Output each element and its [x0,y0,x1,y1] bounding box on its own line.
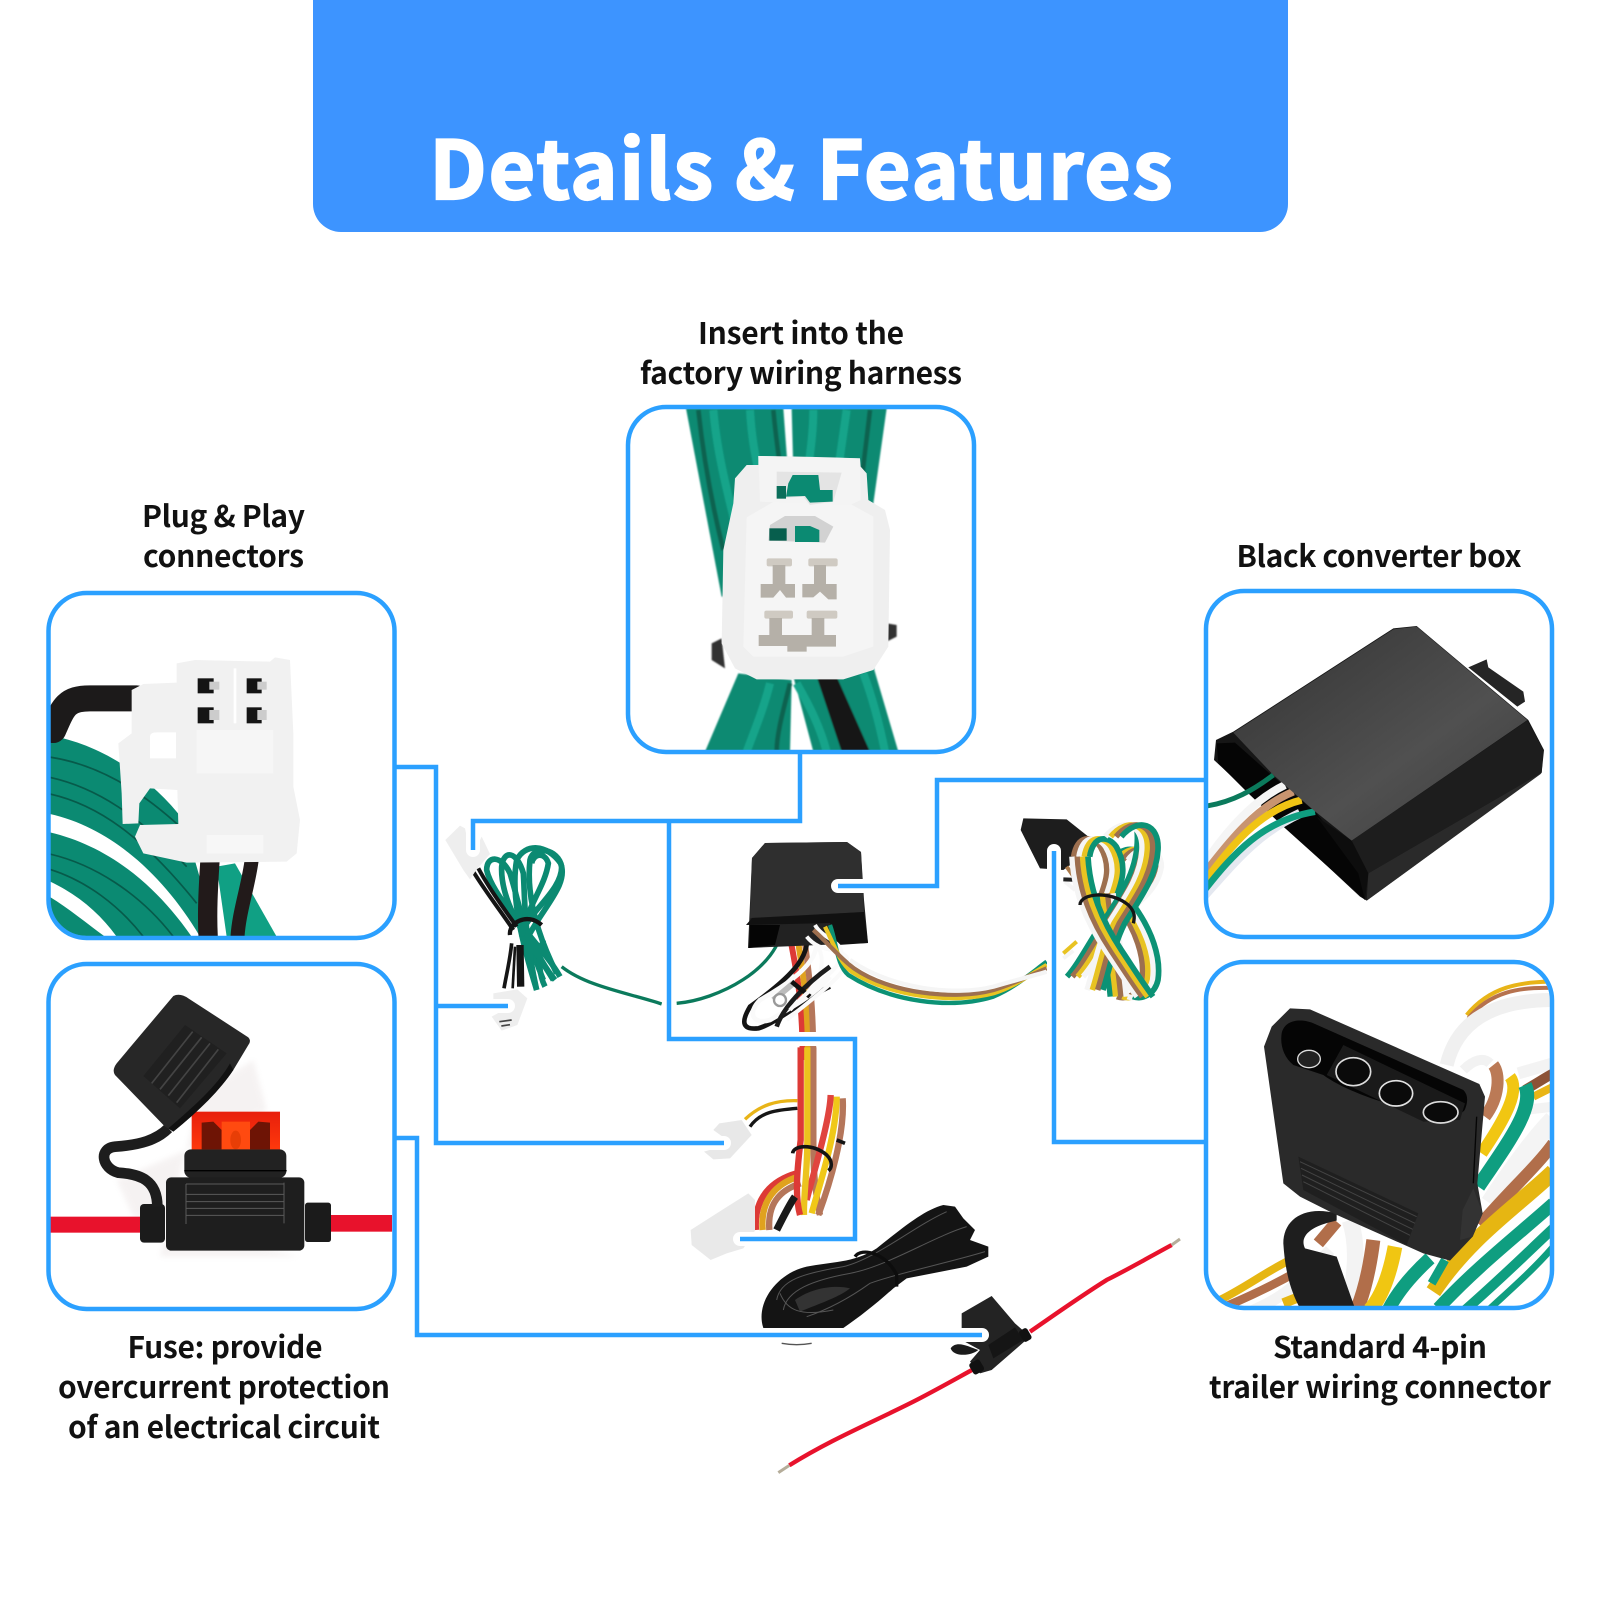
flat 4-pin plug [1021,818,1088,890]
coil tie [855,1252,897,1287]
frame: 4-pin connector [1206,962,1552,1308]
panel: converter box photo [1203,626,1544,901]
secondary white loops over box edge [787,925,847,1020]
leader lines [393,752,1206,1335]
green loops [487,848,562,990]
label: 4-pin connector [1209,1323,1552,1407]
box underside [1214,626,1544,901]
black harness wires [473,868,521,988]
frame: fuse [48,964,394,1309]
white connector housing [722,456,890,679]
plug contacts [499,1020,512,1026]
cable tie [712,623,897,668]
panel: factory harness photo [686,408,898,752]
label: plug and play: connectors [143,532,304,576]
label: fuse: Fuse: provide [128,1323,322,1367]
label: factory harness: factory wiring harness [640,349,962,393]
frame: plug connectors [48,593,394,938]
coil sliver [782,1343,812,1345]
green harness wires [686,408,898,752]
connector contacts [759,558,838,652]
product: green harness coil [445,826,783,1031]
back strands [1074,839,1161,998]
white plug connector [118,657,300,863]
fuse blade [192,1112,280,1152]
connector windows [768,472,842,543]
label: fuse: of an electrical circuit [68,1403,380,1447]
label: converter box: Black converter box [1236,532,1522,576]
label: 4-pin connector: trailer wiring connector [1209,1363,1552,1407]
panel: plug and play photo [47,657,300,940]
product: trailer wire coil [1021,818,1161,998]
trailer cable tie [1080,895,1134,923]
header banner [313,0,1288,232]
black 4-pin housing [1264,1008,1485,1261]
black and white leads with ring terminal [744,927,830,1029]
label: plug and play: Plug & Play [142,492,305,536]
bundle cable ties [793,1140,845,1171]
small plug leads [745,1101,797,1127]
cable tie [510,919,542,935]
fuse cap [114,995,250,1132]
label: plug and play [142,492,305,576]
fuse strap [104,1128,168,1207]
small fuse holder [951,1296,1033,1375]
label: 4-pin connector: Standard 4-pin [1273,1323,1487,1367]
upper white plug [445,826,490,879]
small white plug [704,1120,752,1159]
frame: factory harness [628,407,974,752]
black wires [53,698,252,940]
lower white plug [492,989,527,1031]
product: converter box wiring [744,842,1077,1060]
small converter box [746,842,868,948]
connector strap loop [1283,1211,1355,1308]
red and tan coil [756,1047,843,1230]
title: Details & Features [430,107,1172,223]
white halos around leader lines [436,821,1054,1335]
shadow [120,1064,278,1256]
long green wire left [562,967,662,1004]
white tube connector [691,1193,755,1260]
panel: fuse photo [47,995,393,1257]
connector pins [198,678,267,723]
banner background [313,0,1288,232]
converter wires [1203,775,1315,897]
red fuse wire [789,1245,1172,1465]
leader: plug lower branch [436,1004,508,1008]
leader: converter box [838,780,1206,886]
box tab [1468,659,1525,707]
label: factory harness [640,309,962,393]
leader: factory harness [473,752,800,850]
red yellow brown wires upper [788,927,813,1060]
panel: 4-pin connector photo [1220,982,1553,1313]
long green wire right [677,924,783,1003]
black cable coil [762,1205,988,1328]
front strands [1067,825,1158,997]
trailer wires [1220,982,1553,1313]
leader: fuse [393,1138,982,1335]
leader: 4-pin connector [1054,851,1206,1142]
product: fused power harness [691,1047,1180,1473]
label: factory harness: Insert into the [698,309,904,353]
fuse holder body [140,1149,331,1251]
label: fuse: overcurrent protection [58,1363,390,1407]
connector sockets [1298,1050,1458,1123]
green wire coil [47,735,277,937]
leader: harness branch to red wires [669,821,855,1239]
wire tips [778,1239,1180,1473]
leader: plug connectors [394,767,724,1143]
black box shell [1233,627,1543,901]
frame: converter box [1206,591,1552,937]
panel frames [48,407,1552,1309]
label: fuse [58,1323,390,1447]
red wire [47,1215,393,1233]
flat four wire ribbon [813,925,1077,1003]
